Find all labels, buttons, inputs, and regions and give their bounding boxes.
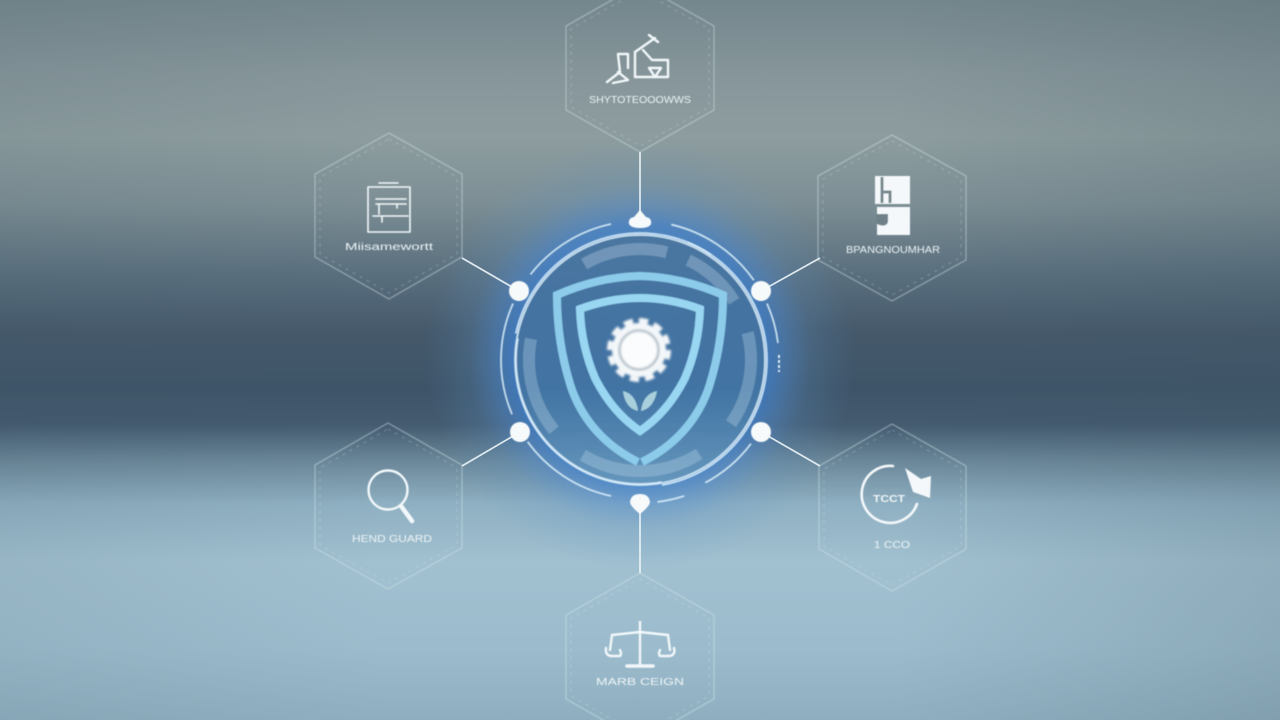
outer arcs — [445, 165, 835, 555]
label: BPANGNOUMHAR — [846, 245, 940, 256]
icon: timer ring with arrow — [862, 466, 931, 523]
panel: bottom hexagon — [566, 573, 714, 720]
panel: upper-right hexagon — [818, 135, 966, 301]
icon: balance scales — [606, 622, 674, 666]
icon: tools — [607, 35, 668, 83]
shield inner — [580, 298, 700, 431]
segmented inner ring — [484, 204, 796, 516]
label: HEND GUARD — [352, 534, 432, 545]
central shield badge — [445, 165, 835, 555]
connector nodes — [509, 210, 771, 514]
icon: leaves — [623, 391, 657, 411]
inner disc — [515, 235, 765, 485]
icon: gear — [610, 320, 668, 380]
timer value: TCCT — [873, 494, 905, 505]
connector lines — [462, 152, 820, 573]
label: SHYTOTEOOOWWS — [589, 95, 691, 106]
shield outer — [557, 276, 723, 462]
panel: lower-left hexagon — [315, 423, 462, 589]
icon: clipboard — [368, 183, 410, 232]
label: MARB CEIGN — [596, 677, 684, 688]
icon: magnifying glass — [368, 470, 412, 521]
central glow — [425, 140, 855, 570]
label: Miisamewortt — [345, 242, 433, 253]
panel: lower-right hexagon — [819, 424, 966, 591]
panel: top hexagon — [566, 0, 714, 152]
panel: upper-left hexagon — [315, 133, 462, 299]
main ring — [475, 195, 805, 525]
icon: document blocks — [875, 176, 910, 235]
label: 1 CCO — [874, 540, 910, 551]
